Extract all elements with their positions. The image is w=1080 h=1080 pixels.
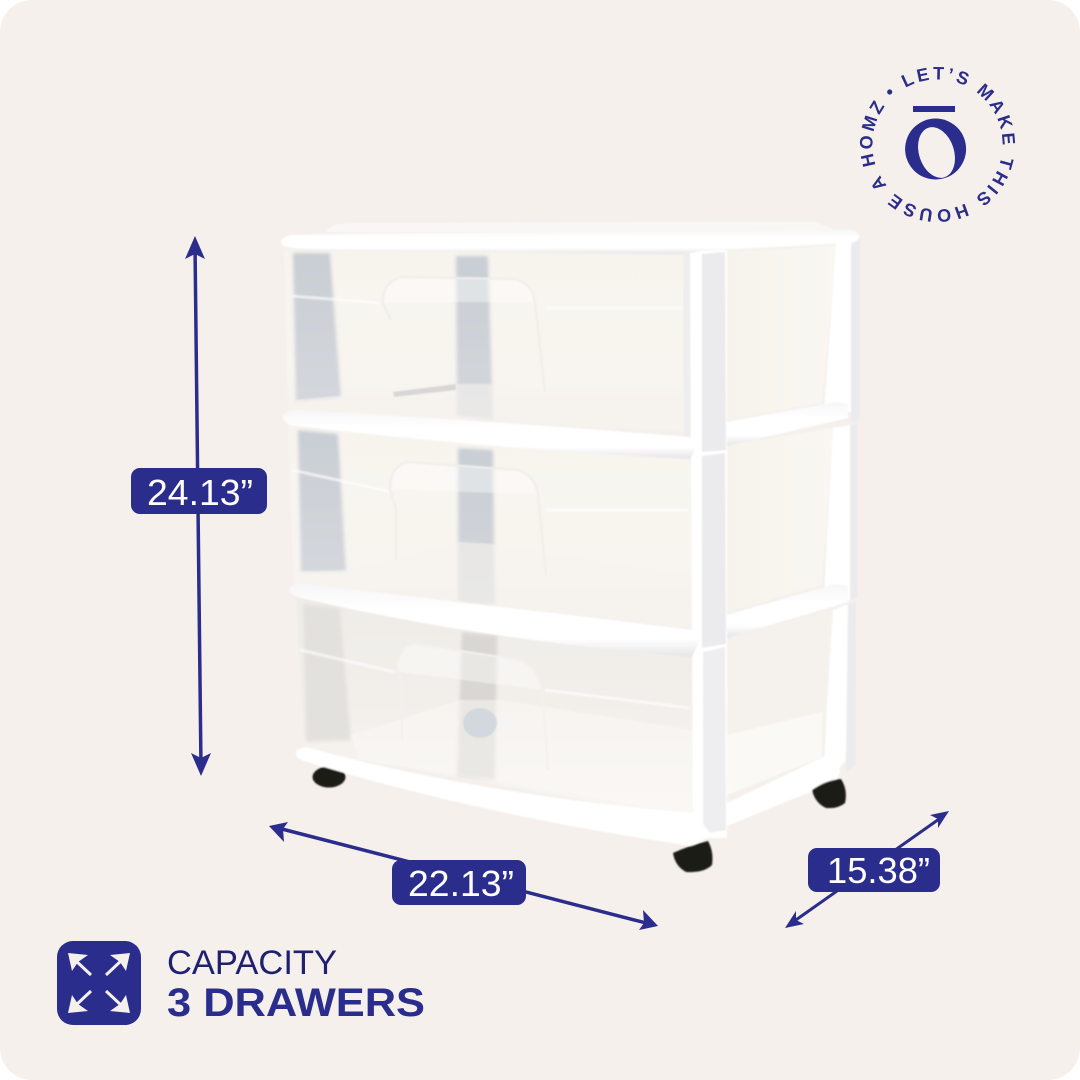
dimension: height: [131, 236, 267, 776]
brand badge: [860, 67, 1016, 222]
back lid: [326, 222, 842, 232]
drawer 2 front rim: [283, 410, 698, 459]
rear caster seen through drawer: [463, 708, 497, 738]
rear column centre: [456, 256, 493, 420]
drawer handle: [390, 462, 546, 575]
logo bar: [913, 106, 955, 112]
arrow down-right: [106, 991, 130, 1013]
caster: rear left: [312, 766, 346, 788]
label: 22.13: [392, 860, 526, 905]
arrow up-right: [106, 953, 130, 975]
caster: rear right: [812, 779, 846, 808]
rear column centre: [457, 632, 497, 780]
side rims: [727, 402, 848, 446]
drawer handle: [397, 644, 548, 770]
arrow: height: [185, 236, 211, 776]
product photo: three drawer storage cart: [281, 222, 860, 872]
rear column left: [293, 253, 341, 402]
arrow up-left: [68, 953, 91, 975]
rear column left: [303, 604, 351, 742]
circular slogan: • LET’S MAKE THIS HOUSE A HOMZ: [860, 67, 1016, 222]
arrow down-left: [68, 991, 91, 1013]
capacity label: CAPACITY: [167, 944, 337, 982]
capacity icon: [57, 941, 141, 1025]
arrow: depth: [785, 811, 949, 928]
caster: front: [673, 841, 712, 872]
label: 22.13: 22.13”: [408, 863, 514, 904]
dimension: width: [269, 822, 658, 930]
drawer 2: [288, 425, 692, 632]
front right post: [683, 250, 727, 838]
label: 24.13: 24.13”: [147, 472, 253, 513]
rear column left: [298, 430, 346, 572]
drawer handle: [383, 277, 545, 392]
capacity value: 3 DRAWERS: [167, 981, 425, 1025]
drawer 1: [284, 250, 690, 436]
side panels: [727, 245, 837, 795]
label: 15.38: 15.38”: [827, 850, 930, 891]
arrow: width: [269, 822, 658, 930]
rear right post: [824, 239, 860, 772]
top rim: [281, 229, 859, 254]
logo ring: [905, 118, 966, 183]
drawer 3: [296, 597, 694, 820]
rear column centre: [458, 448, 495, 605]
drawer 3 front rim: [290, 584, 700, 657]
dimension: depth: [785, 811, 949, 928]
bottom front rim: [296, 748, 712, 846]
label: 24.13: [131, 468, 267, 514]
